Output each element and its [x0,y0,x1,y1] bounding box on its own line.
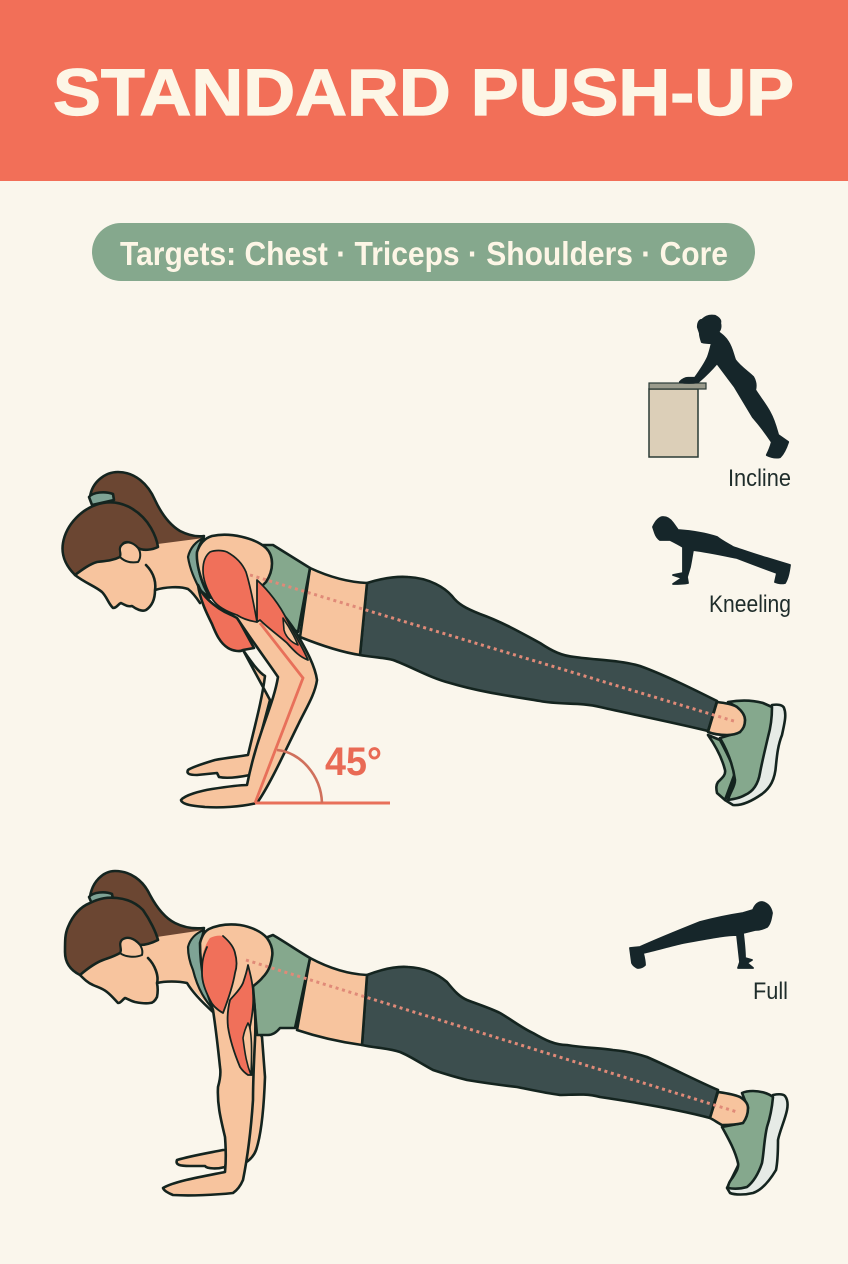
ear [120,938,142,957]
head hair [65,898,158,975]
ponytail [90,472,204,550]
ankle [708,702,745,735]
title banner: STANDARD PUSH-UP [53,55,794,129]
incline silhouette [680,316,788,457]
leggings [360,577,717,731]
deltoid muscle [203,550,257,622]
variation: full [630,902,788,1005]
figure: raised push-up position [65,871,788,1195]
full label: Full [753,978,788,1005]
deltoid muscle [202,936,236,1013]
triceps notch [243,1023,252,1075]
chest muscle [198,585,254,651]
elbow line [255,623,303,803]
midriff [300,568,367,655]
back arm [240,1030,265,1163]
body alignment dotted line, lowered [250,575,737,722]
hair band [89,492,114,505]
ponytail [90,871,204,942]
target muscles pill: Targets: Chest · Triceps · Shoulders · Core [120,235,728,272]
variation: incline [649,316,791,492]
head hair [62,502,158,575]
triceps muscle [257,580,308,660]
leggings [362,967,718,1118]
neck and face [75,530,204,611]
kneeling silhouette [653,517,790,584]
arm [163,924,272,1195]
ankle [710,1092,748,1125]
face outline [80,958,213,1012]
sports top [253,935,310,1035]
angle indicator [255,740,390,803]
title banner [0,0,848,181]
back arm [187,650,270,778]
angle value: 45° [325,740,382,784]
back hand [177,1150,230,1168]
hair band [89,892,113,904]
ear [120,542,140,562]
full silhouette [630,902,772,968]
incline box [649,389,698,457]
figure: lowered push-up position [62,472,785,807]
deltoid outline [202,936,236,1013]
body alignment dotted line, raised [246,960,737,1112]
incline label: Incline [728,465,791,492]
shoe sole [727,1094,788,1194]
triceps muscle [228,965,253,1075]
midriff [297,958,367,1045]
variation: kneeling [653,517,791,618]
shoulder strap [188,930,215,1012]
incline box top [649,383,706,389]
sports top [250,545,310,632]
kneeling label: Kneeling [709,591,791,618]
neck and face [80,930,213,1010]
shoulder strap [188,538,210,598]
target muscles pill [92,223,755,281]
shoe [722,1091,773,1189]
front shoe [720,701,772,800]
front arm [181,535,317,807]
triceps notch [283,618,298,645]
back shoe [708,735,735,800]
shoe sole [725,705,785,805]
face outline [75,565,200,611]
